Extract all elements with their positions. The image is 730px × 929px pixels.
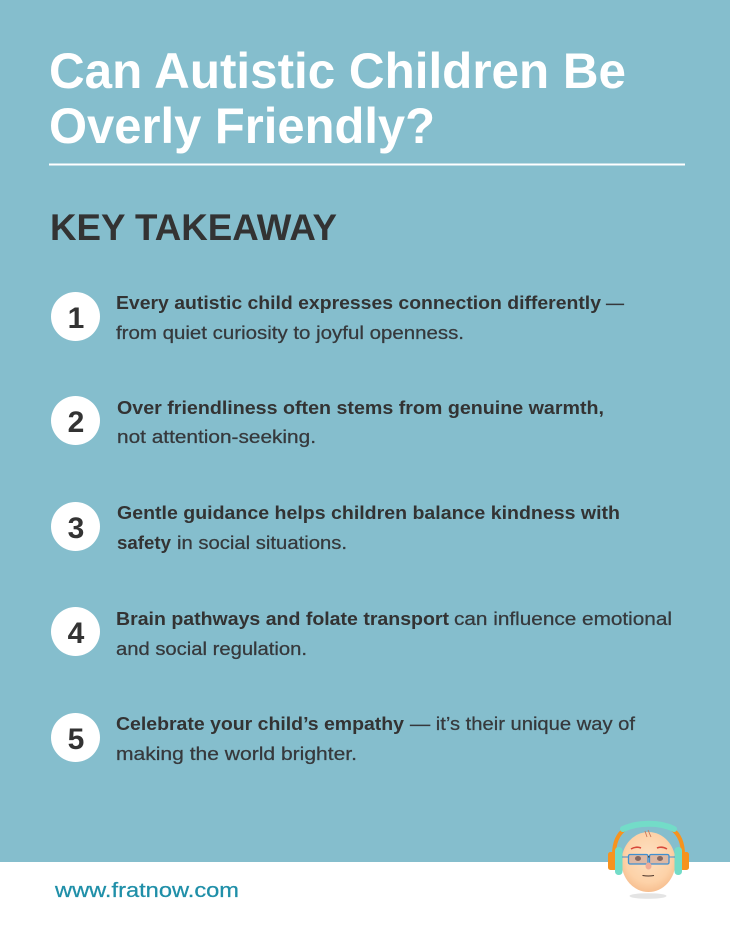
takeaway 3 xyxy=(51,502,620,553)
takeaway 4 xyxy=(51,607,672,659)
title: Overly Friendly? xyxy=(49,98,435,154)
takeaway 5 text: Celebrate your child’s empathy xyxy=(116,714,404,734)
number badge 3 xyxy=(51,502,100,551)
takeaway 5 xyxy=(51,713,636,764)
takeaway 3 text xyxy=(117,503,620,553)
takeaway 4 text: Brain pathways and folate transport xyxy=(116,609,449,629)
number badge 2: 2 xyxy=(68,406,84,439)
number badge 3: 3 xyxy=(68,512,84,545)
heading: key takeaway: KEY TAKEAWAY xyxy=(50,207,337,248)
number badge 5: 5 xyxy=(68,723,84,756)
takeaway 1 text: Every autistic child expresses connection differently xyxy=(116,293,601,313)
title xyxy=(49,43,626,154)
number badge 5 xyxy=(51,713,100,762)
takeaway 1 text xyxy=(116,293,624,343)
icon: avatar with headphones xyxy=(608,824,689,899)
number badge 1: 1 xyxy=(68,302,84,335)
takeaway 2 text: Over friendliness often stems from genuine warmth, xyxy=(117,398,604,418)
takeaway 3 text: Gentle guidance helps children balance kindness with xyxy=(117,503,620,523)
takeaway 4 text xyxy=(116,609,672,659)
takeaway 5 text: making the world brighter. xyxy=(116,744,357,764)
number badge 4: 4 xyxy=(68,617,85,650)
number badge 1 xyxy=(51,292,100,341)
takeaway 4 text: can influence emotional xyxy=(454,609,672,629)
takeaway 5 text: — it’s their unique way of xyxy=(410,714,636,734)
website url: www.fratnow.com xyxy=(54,880,239,902)
takeaway 1 xyxy=(51,292,624,343)
footer band xyxy=(0,862,730,929)
takeaway 1 text: — xyxy=(606,293,624,313)
takeaway 5 text xyxy=(116,714,636,764)
number badge 2 xyxy=(51,396,100,445)
takeaway 2 xyxy=(51,396,604,447)
takeaway 4 text: and social regulation. xyxy=(116,639,307,659)
takeaway 1 text: from quiet curiosity to joyful openness. xyxy=(116,323,464,343)
title: Can Autistic Children Be xyxy=(49,43,626,99)
number badge 4 xyxy=(51,607,100,656)
takeaway 3 text: in social situations. xyxy=(177,533,347,553)
takeaway 3 text: safety xyxy=(117,533,171,553)
takeaway 2 text: not attention-seeking. xyxy=(117,427,316,447)
takeaway 2 text xyxy=(117,398,604,447)
